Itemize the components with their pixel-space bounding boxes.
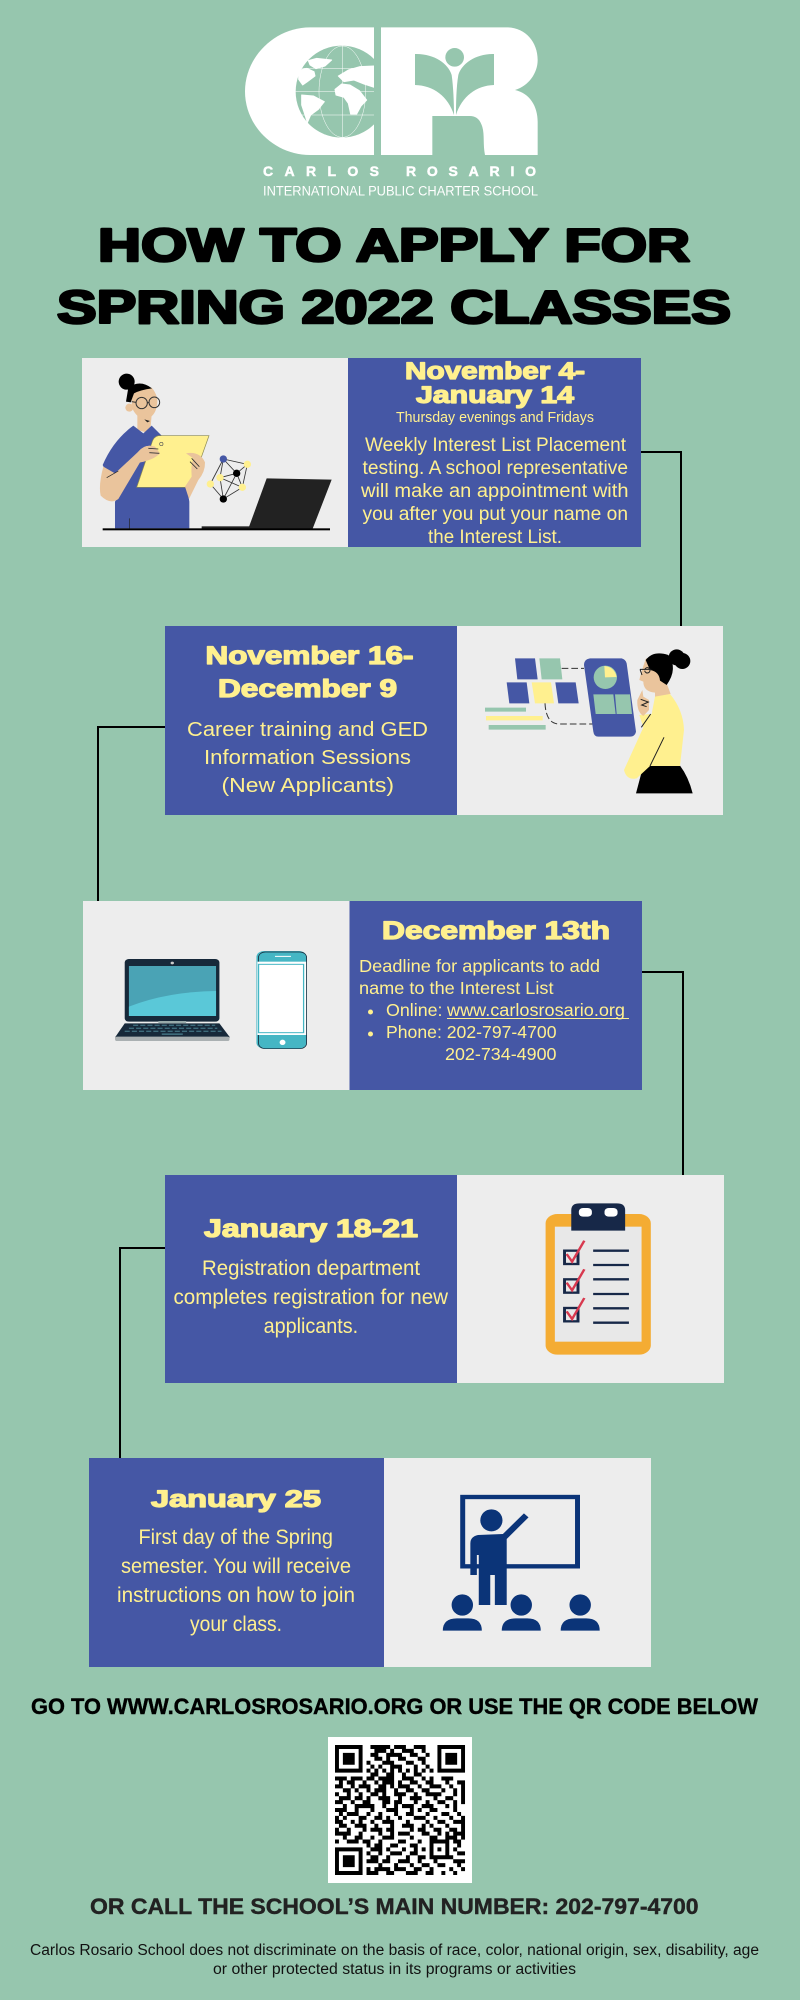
non-discrimination notice: or other protected status in its programs or activities — [213, 1961, 576, 1978]
date heading: December 9 — [218, 675, 397, 703]
panel: step 3 December 13th — [83, 901, 642, 1090]
icon: clipboard checklist — [546, 1203, 651, 1355]
body text: applicants. — [264, 1314, 358, 1338]
body text: instructions on how to join — [117, 1583, 355, 1607]
arrow: connector from step 1 to step 2 — [641, 452, 681, 626]
panel: step 4 January 18-21 — [165, 1175, 724, 1383]
arrow: connector from step 4 to step 5 — [120, 1248, 165, 1458]
body text: Deadline for applicants to add — [359, 956, 600, 976]
body text: the Interest List. — [428, 527, 562, 548]
icon: laptop and phone — [115, 951, 307, 1049]
logo: Carlos Rosario school — [245, 27, 538, 198]
call to action: phone number: OR CALL THE SCHOOL’S MAIN NUMBER: 202-797-4700 — [90, 1894, 699, 1919]
subheading: Thursday evenings and Fridays — [396, 410, 594, 426]
title — [57, 219, 731, 333]
body text: 202-734-4900 — [445, 1044, 557, 1064]
date heading: January 25 — [151, 1486, 321, 1513]
date heading: January 18-21 — [204, 1215, 418, 1243]
body text: you after you put your name on — [362, 504, 628, 525]
body text — [187, 718, 428, 797]
body text: testing. A school representative — [362, 458, 628, 479]
body text: semester. You will receive — [121, 1554, 351, 1578]
date heading: November 4- — [405, 358, 585, 385]
body text: www.carlosrosario.org — [446, 1000, 625, 1020]
body text: your class. — [190, 1612, 282, 1636]
icon: woman with tablet and laptop — [100, 374, 332, 530]
logo subtitle: INTERNATIONAL PUBLIC CHARTER SCHOOL — [263, 184, 538, 198]
body text: (New Applicants) — [222, 774, 394, 797]
title: SPRING 2022 CLASSES — [57, 281, 731, 333]
body text: completes registration for new — [174, 1285, 448, 1309]
date heading — [206, 642, 414, 703]
logo mark: CR letters with globe and reader — [245, 27, 538, 155]
body text — [359, 956, 629, 1064]
icon: teacher at board with students — [443, 1497, 600, 1631]
date heading — [405, 358, 585, 409]
body text: Weekly Interest List Placement — [365, 435, 627, 456]
body text — [117, 1525, 355, 1636]
date heading: December 13th — [382, 917, 610, 945]
logo wordmark: Carlos Rosario: ROSARIO — [406, 163, 536, 179]
body text: Registration department — [202, 1256, 420, 1280]
body text — [174, 1256, 448, 1338]
date heading: November 16- — [206, 642, 414, 670]
panel: step 5 January 25 — [89, 1458, 651, 1667]
panel: step 2 November 16 - December 9 — [165, 626, 723, 815]
body text: First day of the Spring — [138, 1525, 333, 1549]
arrow: connector from step 2 to step 3 — [98, 727, 165, 901]
arrow: connector from step 3 to step 4 — [642, 972, 683, 1175]
icon: woman looking at dashboard — [485, 649, 693, 793]
logo wordmark: Carlos Rosario — [263, 163, 536, 179]
non-discrimination notice: Carlos Rosario School does not discriminate on the basis of race, color, national origin, sex, disability, age — [30, 1942, 759, 1959]
QR code — [328, 1737, 472, 1883]
non-discrimination notice — [30, 1942, 759, 1978]
panel: step 1 November 4 - January 14 — [82, 358, 641, 548]
body text: Phone: 202-797-4700 — [386, 1022, 557, 1042]
body text: Information Sessions — [204, 746, 411, 769]
logo wordmark: Carlos Rosario: CARLOS — [263, 163, 379, 179]
body text: Online: — [386, 1000, 442, 1020]
body text — [360, 435, 628, 548]
date heading: January 14 — [416, 382, 575, 409]
body text: Career training and GED — [187, 718, 428, 741]
body text: name to the Interest List — [359, 978, 554, 998]
body text: will make an appointment with — [360, 481, 628, 502]
call to action: website: GO TO WWW.CARLOSROSARIO.ORG OR USE THE QR CODE BELOW — [31, 1694, 758, 1719]
title: HOW TO APPLY FOR — [98, 219, 690, 271]
